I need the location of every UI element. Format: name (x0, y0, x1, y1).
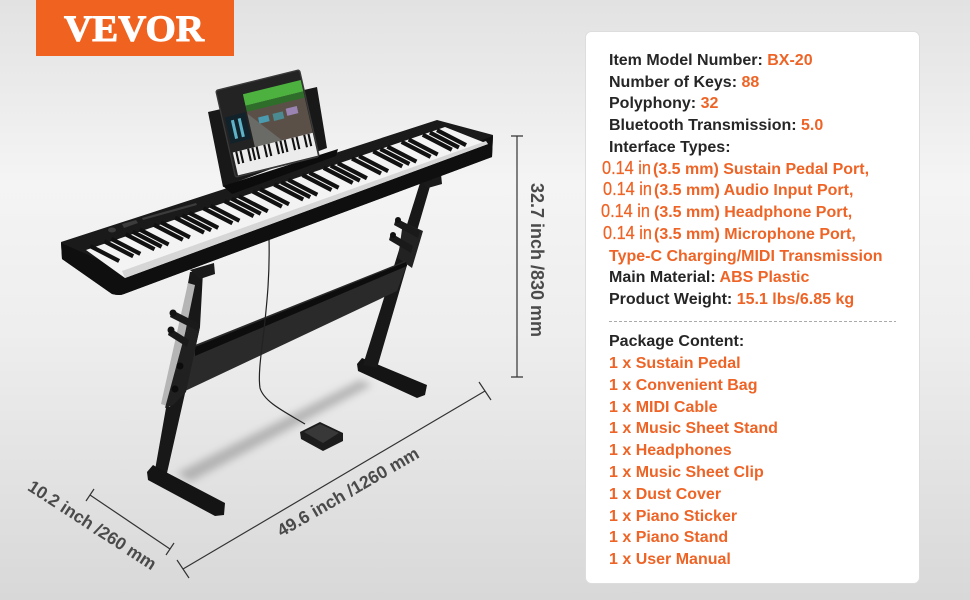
package content list (609, 333, 778, 568)
keyboard body (61, 120, 493, 295)
tablet instruments (258, 115, 270, 124)
keyboard front edge (61, 136, 493, 295)
item: manual: 1 x User Manual (609, 551, 731, 568)
item: cable: 1 x MIDI Cable (609, 399, 718, 416)
right foot (357, 358, 427, 398)
pedal cable (259, 238, 305, 424)
black keys (90, 130, 466, 261)
item: piano stand: 1 x Piano Stand (609, 529, 728, 546)
tablet room backdrop (246, 91, 313, 147)
spec: interface heading: Interface Types: (609, 139, 731, 156)
item: sticker: 1 x Piano Sticker (609, 508, 737, 525)
left bracket (165, 319, 200, 408)
dimension: length (177, 382, 491, 578)
interface: audio input port: 0.14 in (603, 179, 652, 199)
interface: sustain pedal port: 0.14 in (602, 158, 651, 178)
item: bag: 1 x Convenient Bag (609, 377, 757, 394)
top support blocks (190, 263, 215, 279)
interface: microphone port (603, 223, 856, 243)
spec: keys: Number of Keys: 88 (609, 74, 759, 91)
left foot (147, 465, 225, 516)
interface: headphone port: 0.14 in (601, 201, 650, 221)
tablet mixer (225, 112, 251, 144)
music holder (208, 87, 327, 187)
spec: model: Item Model Number: BX-20 (609, 52, 813, 69)
cross bar (185, 261, 407, 391)
package heading: Package Content: (609, 333, 744, 350)
keyboard (61, 120, 493, 295)
dimension: height (511, 136, 547, 377)
spec: material: Main Material: ABS Plastic (609, 269, 809, 286)
item: pedal: 1 x Sustain Pedal (609, 355, 741, 372)
interface: audio input port: (3.5 mm) Audio Input Port, (654, 182, 853, 199)
control panel (108, 203, 197, 232)
spec: weight: Product Weight: 15.1 lbs/6.85 kg (609, 291, 854, 308)
floor shadow of the stand (177, 380, 372, 482)
right height bracket (398, 222, 423, 268)
stand (147, 174, 442, 516)
panel: specifications (586, 32, 920, 584)
item: dust cover: 1 x Dust Cover (609, 486, 721, 503)
dimension: length: 49.6 inch /1260 mm (274, 443, 422, 541)
dimension: depth: 10.2 inch /260 mm (24, 476, 160, 574)
logo: VEVOR: VEVOR (64, 9, 205, 50)
dimension: height: 32.7 inch /830 mm (527, 183, 547, 337)
sustain pedal (300, 422, 343, 451)
interface: audio input port (603, 179, 853, 199)
tablet green band (243, 80, 303, 106)
tablet (215, 69, 320, 178)
interface: sustain pedal port (602, 158, 869, 178)
item: headphones: 1 x Headphones (609, 442, 732, 459)
white keys (86, 127, 488, 278)
holder ledge (223, 149, 338, 194)
item: sheet stand: 1 x Music Sheet Stand (609, 420, 778, 437)
interface: headphone port: (3.5 mm) Headphone Port, (654, 204, 852, 221)
interface: headphone port (601, 201, 852, 221)
spec: bluetooth: Bluetooth Transmission: 5.0 (609, 117, 823, 134)
interface: microphone port: (3.5 mm) Microphone Port, (654, 226, 856, 243)
spec: polyphony: Polyphony: 32 (609, 95, 718, 112)
spec list (601, 52, 883, 308)
right leg (363, 183, 431, 368)
left leg (155, 272, 203, 473)
interface: type-c: Type-C Charging/MIDI Transmission (609, 248, 883, 265)
tablet piano keys (233, 133, 318, 175)
interface: microphone port: 0.14 in (603, 223, 652, 243)
interface: sustain pedal port: (3.5 mm) Sustain Pedal Port, (653, 161, 869, 178)
logo: VEVOR (36, 0, 234, 56)
item: clip: 1 x Music Sheet Clip (609, 464, 764, 481)
left leg ruler (161, 283, 195, 407)
